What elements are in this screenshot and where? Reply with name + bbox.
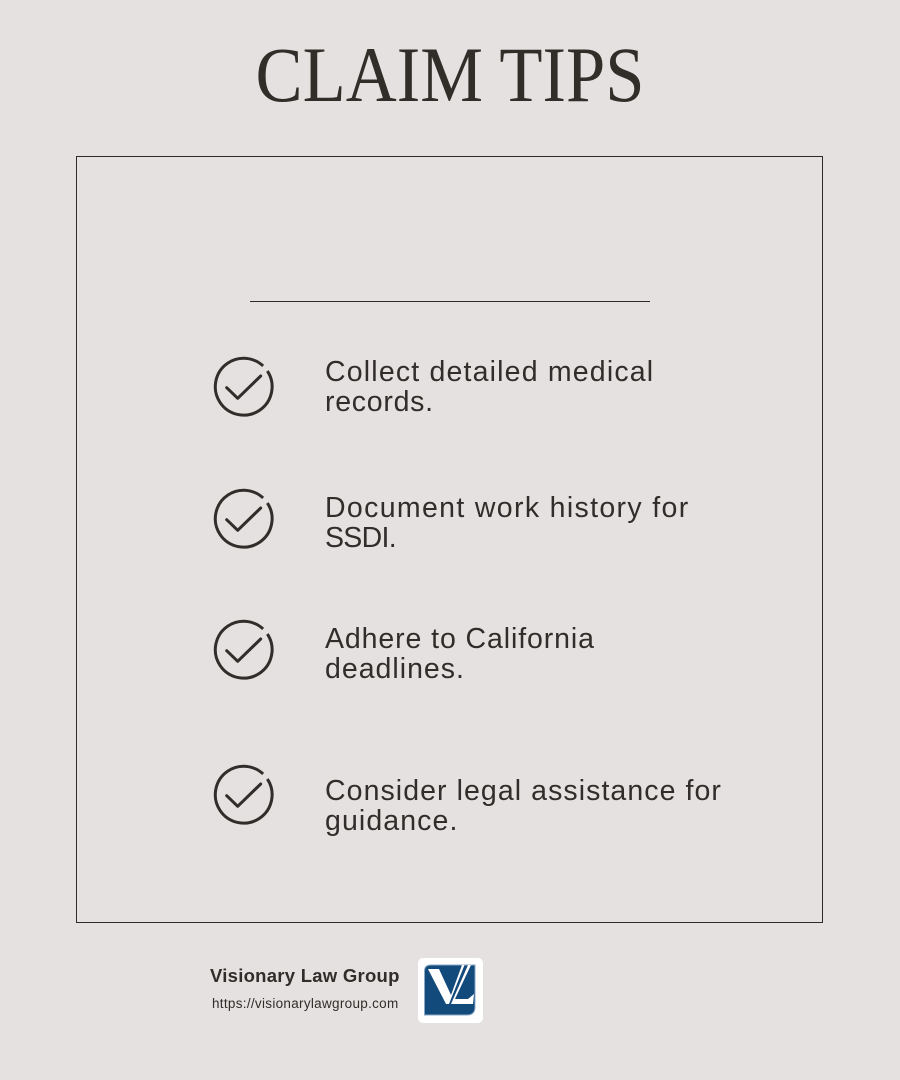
tip text 2: Document work history for	[325, 492, 690, 524]
icon: check circle 3	[214, 620, 274, 680]
icon: check circle 2	[214, 488, 274, 549]
tip text 1: records.	[325, 386, 434, 418]
tip text 1	[325, 356, 654, 418]
panel: tips frame	[76, 156, 823, 923]
logo	[418, 958, 483, 1023]
tip text 2	[325, 492, 690, 554]
tip text 4: Consider legal assistance for	[325, 775, 722, 807]
divider line	[250, 301, 650, 302]
tip text 3: Adhere to California	[325, 623, 595, 655]
title: CLAIM TIPS	[256, 31, 644, 118]
icon: check circle 4	[214, 764, 274, 825]
icon: check circle 1	[214, 356, 274, 417]
tip text 1: Collect detailed medical	[325, 356, 654, 388]
tip text 4: guidance.	[325, 804, 459, 836]
tip text 2: SSDI.	[325, 522, 396, 554]
tip text 3	[325, 623, 595, 684]
footer url: https://visionarylawgroup.com	[212, 996, 399, 1011]
tip text 4	[325, 775, 722, 836]
tip text 3: deadlines.	[325, 652, 465, 684]
footer brand name: Visionary Law Group	[210, 965, 400, 986]
